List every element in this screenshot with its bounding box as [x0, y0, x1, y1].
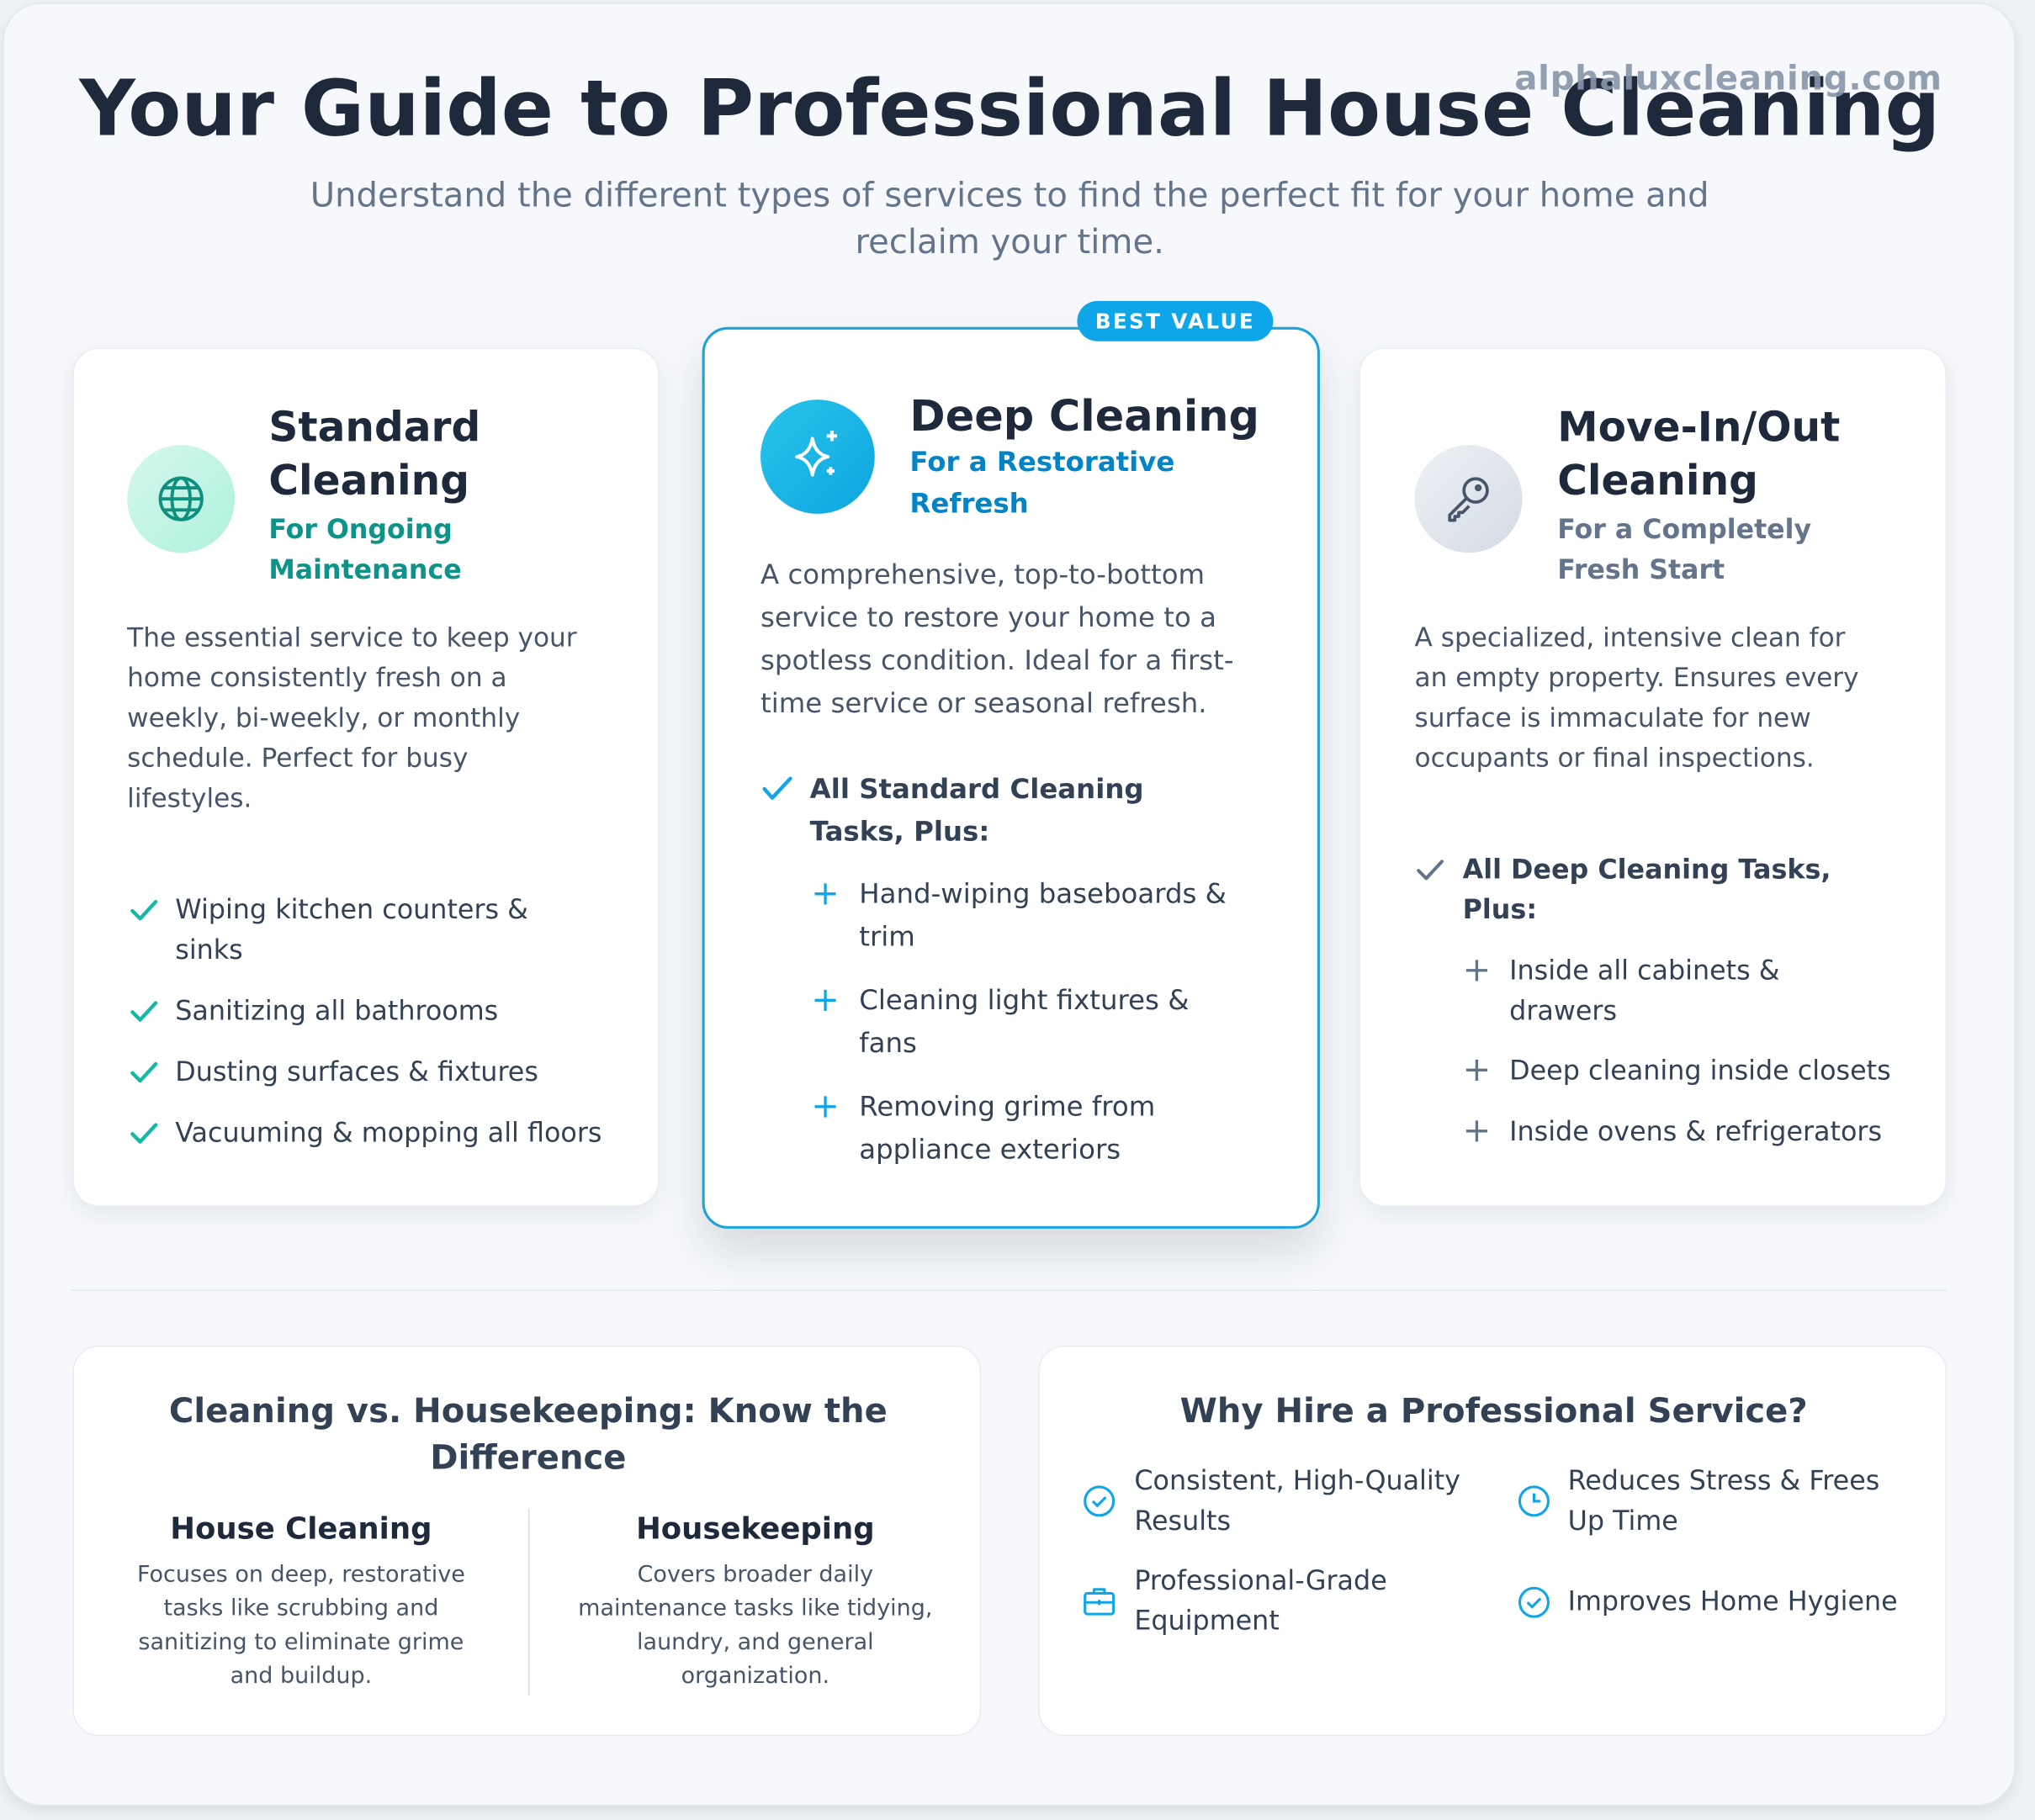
- checklist: +: [811, 1087, 840, 1126]
- checklist: appliance exteriors: [859, 1134, 1121, 1165]
- panel: cleaning vs housekeeping: [72, 1346, 981, 1736]
- heading: Standard: [268, 405, 480, 452]
- heading: Cleaning: [268, 458, 469, 505]
- checklist: [1417, 854, 1891, 1151]
- checklist: Removing grime from: [859, 1091, 1155, 1122]
- subheading: [1557, 514, 1811, 585]
- title: Your Guide to Professional House Cleaning: [79, 65, 1940, 155]
- checklist: Plus:: [1463, 894, 1537, 925]
- checklist: All Deep Cleaning Tasks,: [1463, 854, 1831, 885]
- panel: move-in/out: [1359, 347, 1947, 1207]
- checklist: Wiping kitchen counters &: [175, 894, 528, 925]
- badge: best value: BEST VALUE: [1095, 309, 1255, 333]
- subheading: [909, 447, 1174, 519]
- benefit: stress: Up Time: [1568, 1505, 1678, 1537]
- checklist: Cleaning light fixtures &: [859, 985, 1189, 1016]
- badge: best value: [1077, 301, 1273, 341]
- checklist: Inside all cabinets &: [1509, 955, 1780, 986]
- checklist: Vacuuming & mopping all floors: [175, 1117, 601, 1148]
- column: housekeeping: Housekeeping: [636, 1513, 875, 1547]
- subheading: For Ongoing: [268, 514, 453, 545]
- checklist: trim: [859, 921, 915, 952]
- checklist: Tasks, Plus:: [810, 816, 989, 847]
- subheading: [268, 514, 462, 585]
- description: The essential service to keep your home consistently fresh on a weekly, bi-weekly, or monthly schedule. Perfect for busy lifestyles.: [127, 622, 577, 813]
- checklist: +: [811, 875, 840, 913]
- heading: Move-In/Out: [1557, 405, 1840, 452]
- column: house cleaning: Focuses on deep, restorative tasks like scrubbing and sanitizing to eliminate grime and buildup.: [137, 1562, 465, 1690]
- subheading: Refresh: [909, 488, 1029, 519]
- description: A specialized, intensive clean for an empty property. Ensures every surface is immaculate for new occupants or final inspections.: [1415, 622, 1859, 773]
- checklist: fans: [859, 1028, 917, 1059]
- heading: [1557, 405, 1840, 505]
- subheading: For a Restorative: [909, 447, 1174, 478]
- heading: Cleaning vs. Housekeeping: Know the Difference: [169, 1392, 888, 1478]
- heading: Why Hire a Professional Service?: [1180, 1392, 1808, 1431]
- benefit: consistent: Consistent, High-Quality: [1134, 1465, 1460, 1496]
- heading: [268, 405, 480, 505]
- checklist: +: [811, 981, 840, 1020]
- checklist: All Standard Cleaning: [810, 773, 1144, 804]
- checklist: Hand-wiping baseboards &: [859, 878, 1227, 909]
- benefit: equipment: Equipment: [1134, 1605, 1280, 1636]
- benefit: equipment: [1084, 1564, 1387, 1636]
- subheading: Maintenance: [268, 554, 462, 585]
- checklist: Inside ovens & refrigerators: [1509, 1116, 1882, 1147]
- checklist: +: [1463, 951, 1491, 990]
- benefit: consistent: Results: [1134, 1505, 1231, 1537]
- benefit: hygiene: Improves Home Hygiene: [1568, 1585, 1898, 1616]
- subheading: Fresh Start: [1557, 554, 1725, 585]
- checklist: [130, 894, 601, 1148]
- checklist: drawers: [1509, 995, 1617, 1026]
- icon: globe: [127, 445, 235, 553]
- benefit: stress: [1518, 1465, 1879, 1537]
- benefit: stress: Reduces Stress & Frees: [1568, 1465, 1879, 1496]
- heading: Cleaning: [1557, 458, 1758, 505]
- checklist: Deep cleaning inside closets: [1509, 1055, 1891, 1086]
- subtitle: Understand the different types of services to find the perfect fit for your home and reclaim your time.: [310, 177, 1709, 262]
- checklist: +: [1463, 1112, 1491, 1151]
- heading: Deep Cleaning: [909, 390, 1259, 442]
- panel: why hire: [1038, 1346, 1947, 1736]
- checklist: sinks: [175, 934, 243, 966]
- checklist: [762, 773, 1227, 1165]
- description: A comprehensive, top-to-bottom service to restore your home to a spotless condition. Ideal for a first-time service or seasonal refresh.: [760, 559, 1234, 719]
- panel: deep cleaning: [702, 327, 1320, 1229]
- watermark: alphaluxcleaning.com: [1514, 60, 1942, 98]
- checklist: Sanitizing all bathrooms: [175, 995, 498, 1026]
- panel: standard cleaning: [72, 347, 660, 1207]
- subheading: For a Completely: [1557, 514, 1811, 545]
- icon: key: [1415, 445, 1523, 553]
- column: housekeeping: Covers broader daily maintenance tasks like tidying, laundry, and general organization.: [578, 1562, 933, 1690]
- checklist: Dusting surfaces & fixtures: [175, 1056, 538, 1087]
- benefit: equipment: Professional-Grade: [1134, 1564, 1387, 1596]
- icon: sparkle: [760, 399, 875, 514]
- benefit: consistent: [1084, 1465, 1460, 1537]
- column: house cleaning: House Cleaning: [170, 1513, 432, 1547]
- checklist: +: [1463, 1051, 1491, 1090]
